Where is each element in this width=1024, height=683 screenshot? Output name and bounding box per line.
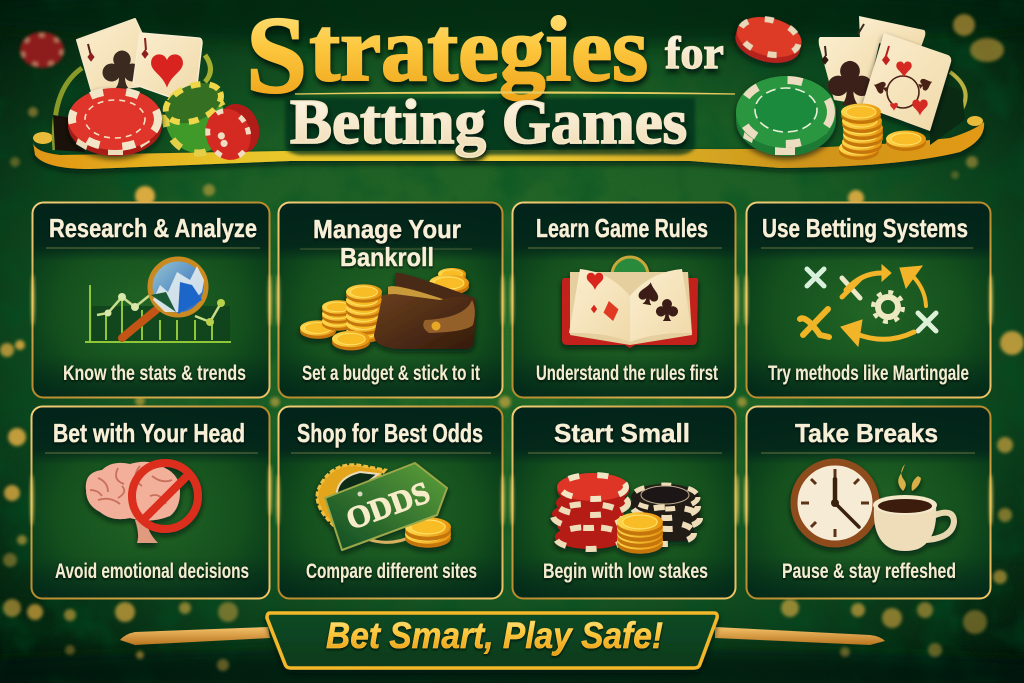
green chip large (736, 76, 836, 156)
card frame (278, 406, 502, 598)
card frame (746, 406, 990, 598)
heading: Bet with Your Head (53, 418, 245, 448)
title (246, 0, 735, 157)
icon: wallet and coins (300, 268, 476, 350)
dark block behind right cards (930, 80, 965, 145)
caption: Begin with low stakes (543, 560, 708, 583)
playing card: hearts right (862, 33, 951, 131)
icon: odds tag and coins (317, 463, 451, 550)
playing card: king of clubs right (819, 37, 880, 105)
icon: chip stacks and coins (552, 473, 700, 554)
strategy cards (32, 202, 990, 598)
card frame (746, 202, 990, 398)
icon: chart and magnifier (85, 259, 231, 342)
caption: Understand the rules first (536, 362, 718, 385)
red dice chip (198, 98, 267, 166)
heading: Take Breaks (795, 418, 938, 448)
green chip on edge (155, 75, 240, 162)
panel: manage your bankroll (278, 202, 502, 398)
icon: strategy play diagram (800, 265, 936, 346)
caption: Set a budget & stick to it (302, 362, 480, 385)
banner text: Bet Smart, Play Safe! (326, 615, 663, 656)
playing card: king of hearts (133, 33, 202, 97)
panel: take breaks (746, 406, 990, 598)
black chip stack (631, 484, 700, 541)
icon: brain with prohibition sign (86, 462, 198, 543)
card frame (32, 202, 270, 398)
title rule (295, 92, 735, 94)
heading: Manage Your (313, 214, 461, 244)
card frame (278, 202, 502, 398)
red flat chip (731, 11, 806, 69)
card frame (512, 406, 736, 598)
footer banner (120, 613, 885, 668)
heading: Start Small (554, 418, 690, 448)
blurred red chip (20, 32, 64, 68)
panel: bet with your head (32, 406, 270, 598)
red chip large (68, 88, 162, 156)
left ribbon (120, 627, 270, 645)
caption: Compare different sites (306, 560, 477, 583)
heading: Use Betting Systems (762, 213, 968, 243)
panel: shop for best odds (278, 406, 502, 598)
single coin (886, 130, 926, 151)
panel: use betting systems (746, 202, 990, 398)
chip ring right (930, 72, 966, 125)
title line Betting Games: Betting Games (290, 87, 687, 157)
header shelf (33, 116, 984, 169)
heading: Shop for Best Odds (297, 418, 483, 448)
header decoration right: chips, coins and cards (731, 11, 966, 160)
title plate behind Betting Games (285, 98, 695, 155)
card frame (512, 202, 736, 398)
right ribbon (715, 627, 885, 645)
icon: clock and coffee cup (794, 462, 954, 551)
title line Strategies: trategies (309, 0, 648, 101)
panel: learn game rules (512, 202, 736, 398)
playing card: king of clubs (77, 19, 150, 92)
caption: Know the stats & trends (63, 362, 246, 385)
chip ring behind cards (53, 55, 210, 152)
title word for: for (665, 27, 724, 78)
card edge glows (30, 274, 992, 526)
coin stack (839, 104, 883, 160)
tag label: ODDS (341, 474, 434, 537)
heading second line: Bankroll (340, 242, 434, 272)
header decoration left: cards and chips (20, 19, 267, 166)
card frame (32, 406, 270, 598)
caption: Pause & stay reffeshed (782, 560, 956, 583)
heading: Learn Game Rules (536, 213, 708, 243)
gold coin stack (617, 530, 663, 554)
panel: research and analyze (32, 202, 270, 398)
caption: Avoid emotional decisions (55, 560, 249, 583)
heading: Research & Analyze (49, 213, 257, 243)
panel: start small (512, 406, 736, 598)
back playing card (858, 16, 925, 50)
icon: open rules book (562, 257, 698, 348)
red chip stack (552, 476, 629, 549)
banner plate (267, 613, 717, 668)
